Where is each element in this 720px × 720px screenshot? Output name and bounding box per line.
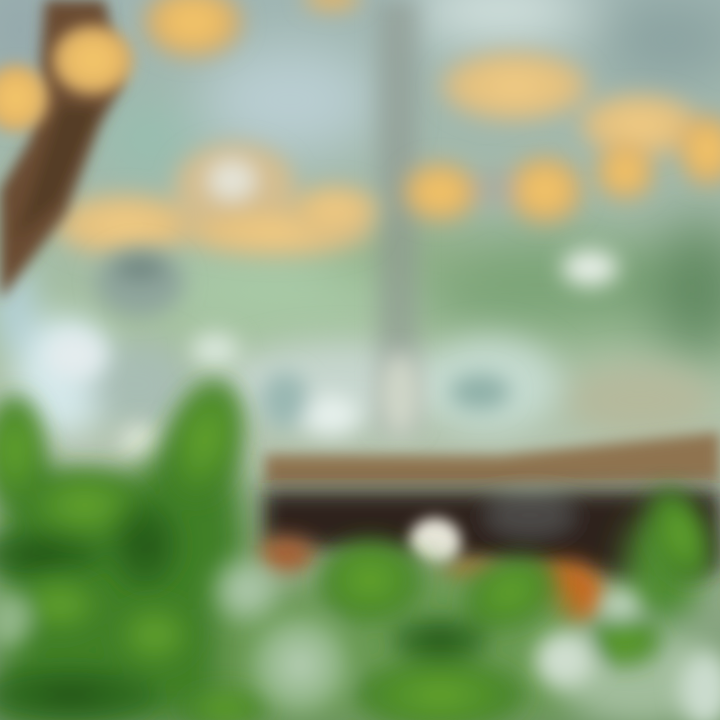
dark area under counter [262,490,720,580]
central post [378,0,418,430]
hanging lamps [50,0,720,257]
background: sky and windows [0,0,720,360]
hanging glass globes and white spots [45,248,618,460]
lamp glow row: middle [50,143,583,257]
background: pale left glow [0,265,715,435]
foliage base [0,400,720,720]
leaf cluster: upper left [0,371,256,590]
wooden counter [265,432,720,484]
foliage leaves [0,371,720,720]
lamp glow row: upper right [439,50,720,200]
lamps on tree [0,24,135,133]
leaf cluster: right [535,478,720,720]
leaf cluster: bottom left [0,556,279,720]
orange accents and white object [255,518,605,629]
leaf cluster: center [252,538,568,720]
tree trunk [0,0,122,300]
lamp glow row: upper left [143,0,360,58]
